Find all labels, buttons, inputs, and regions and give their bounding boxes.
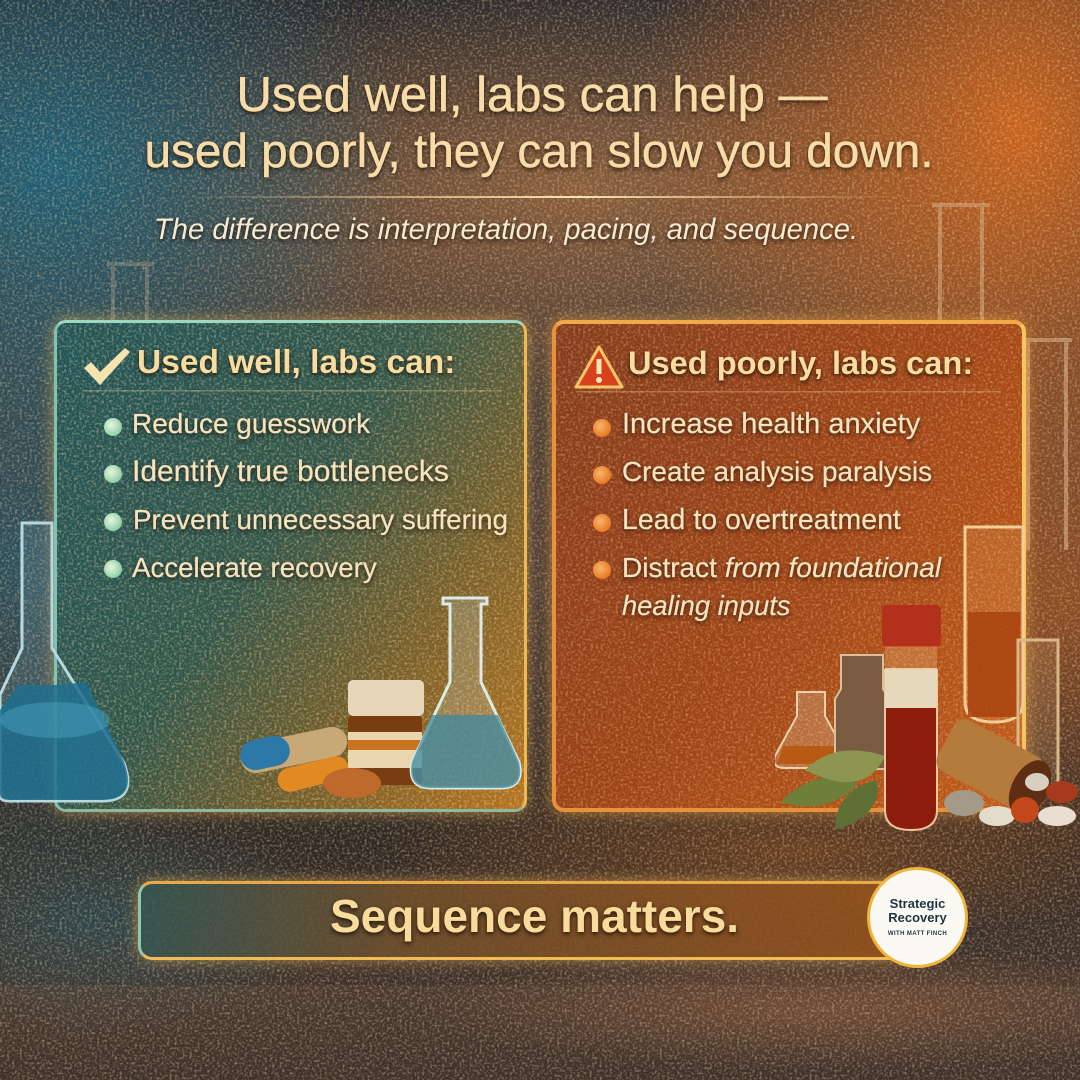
logo badge: Recovery xyxy=(888,910,947,925)
panel: used well xyxy=(54,320,527,812)
list: risks: healing inputs xyxy=(622,590,790,621)
list: risks: Lead to overtreatment xyxy=(622,504,901,536)
list: benefits: Accelerate recovery xyxy=(132,552,377,583)
bottle xyxy=(348,715,422,785)
list: benefits: Identify true bottlenecks xyxy=(132,455,449,488)
list: risks xyxy=(593,408,944,626)
brown bottle xyxy=(835,655,889,769)
icon: warning triangle xyxy=(574,345,624,388)
list: risks: Create analysis paralysis xyxy=(622,456,932,487)
banner text: Sequence matters. xyxy=(330,890,739,942)
list: benefits xyxy=(104,408,510,588)
panel heading: used poorly xyxy=(574,344,974,388)
flask xyxy=(411,598,520,788)
leaves xyxy=(780,777,858,806)
illustration: right tubes, bottles, leaves and pills xyxy=(775,526,1078,831)
panel heading: used well xyxy=(84,344,455,385)
title: Used well, labs can help — xyxy=(236,68,828,122)
short tube xyxy=(1018,640,1058,790)
title: used poorly, they can slow you down. xyxy=(144,125,934,178)
list: benefits: Prevent unnecessary suffering xyxy=(133,504,508,535)
spilled pills xyxy=(944,790,984,816)
list: risks: Increase health anxiety xyxy=(622,408,920,440)
heading text: Used well, labs can: xyxy=(137,344,455,381)
panel: used poorly xyxy=(552,320,1026,812)
capsules xyxy=(238,724,350,776)
illustration: pills and bottle xyxy=(240,596,522,798)
logo badge xyxy=(867,867,968,968)
logo badge: WITH MATT FINCH xyxy=(888,931,947,937)
logo badge: Strategic xyxy=(890,896,945,911)
list: risks: Distract from foundational xyxy=(622,552,941,583)
heading text: Used poorly, labs can: xyxy=(628,344,973,381)
blood tube xyxy=(885,670,937,830)
subtitle: The difference is interpretation, pacing, and sequence. xyxy=(154,214,858,246)
tipped bottle xyxy=(932,715,1048,813)
small flask xyxy=(774,692,848,768)
banner: sequence matters xyxy=(138,881,908,960)
icon: check mark xyxy=(84,348,130,385)
tall tube xyxy=(965,527,1023,722)
illustration: left flask xyxy=(0,522,130,802)
list: benefits: Reduce guesswork xyxy=(132,408,370,439)
title xyxy=(144,68,934,182)
